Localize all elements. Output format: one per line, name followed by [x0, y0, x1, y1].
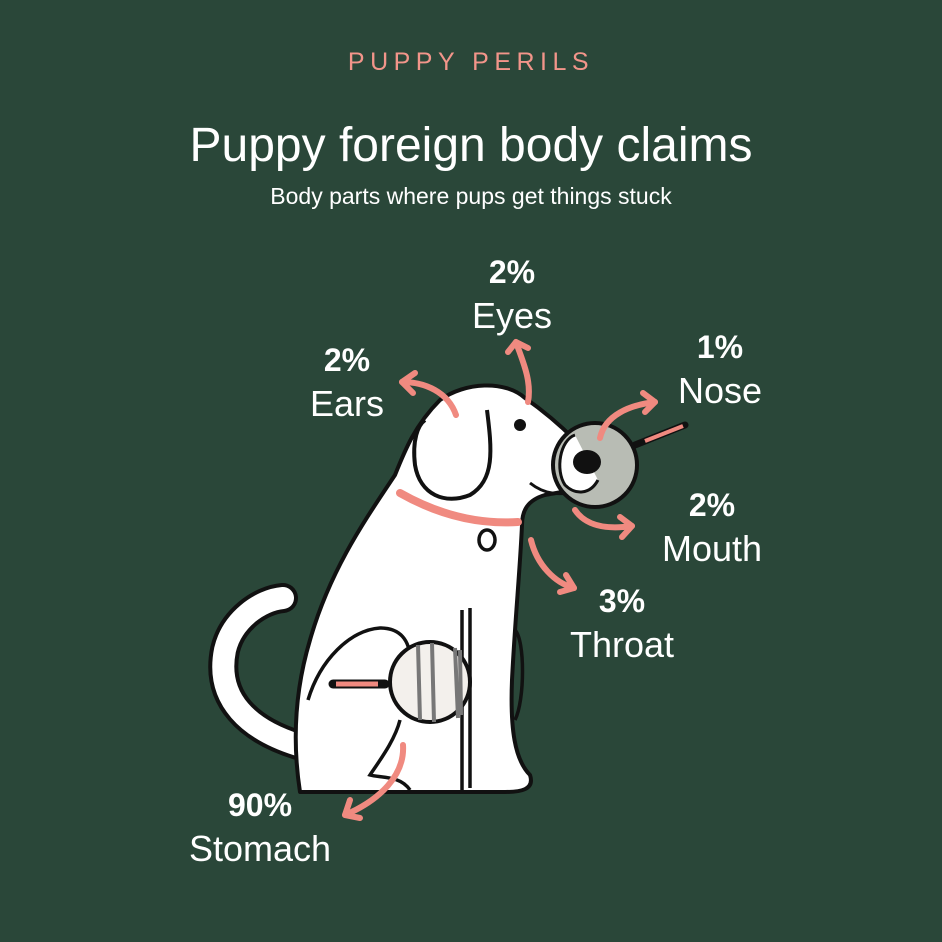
- arrow: nose: [600, 393, 655, 438]
- label: ears: Ears: [310, 383, 384, 424]
- title: Puppy foreign body claims: [190, 119, 752, 172]
- arrow: stomach: [345, 745, 403, 818]
- arrow: ears: [402, 373, 456, 415]
- smile: [530, 483, 575, 494]
- tail: [223, 598, 298, 745]
- label: stomach: [189, 787, 331, 869]
- label: eyes: Eyes: [472, 295, 552, 336]
- nose magnifier: [553, 423, 685, 507]
- label: mouth: Mouth: [662, 528, 762, 569]
- subtitle: Body parts where pups get things stuck: [270, 183, 672, 209]
- arrows: [345, 342, 655, 818]
- hind leg: [308, 628, 410, 790]
- ear: [414, 410, 490, 499]
- label: ears: [310, 342, 384, 424]
- label: ears: 2%: [324, 342, 370, 378]
- arrow: throat: [531, 540, 574, 592]
- label: throat: [570, 583, 674, 665]
- body: [296, 385, 585, 792]
- stomach magnifier: [333, 642, 470, 722]
- front legs: [462, 608, 522, 790]
- label: stomach: 90%: [228, 787, 292, 823]
- label: mouth: 2%: [689, 487, 735, 523]
- label: eyes: 2%: [489, 254, 535, 290]
- label: nose: Nose: [678, 370, 762, 411]
- kicker: PUPPY PERILS: [348, 48, 594, 76]
- label: stomach: Stomach: [189, 828, 331, 869]
- label: eyes: [472, 254, 552, 336]
- arrow: eyes: [508, 342, 529, 402]
- tag: [479, 530, 495, 550]
- label: mouth: [662, 487, 762, 569]
- eye: [514, 419, 526, 431]
- collar: [400, 493, 518, 522]
- label: throat: Throat: [570, 624, 674, 665]
- arrow: mouth: [575, 510, 632, 537]
- label: nose: [678, 329, 762, 411]
- label: nose: 1%: [697, 329, 743, 365]
- label: throat: 3%: [599, 583, 645, 619]
